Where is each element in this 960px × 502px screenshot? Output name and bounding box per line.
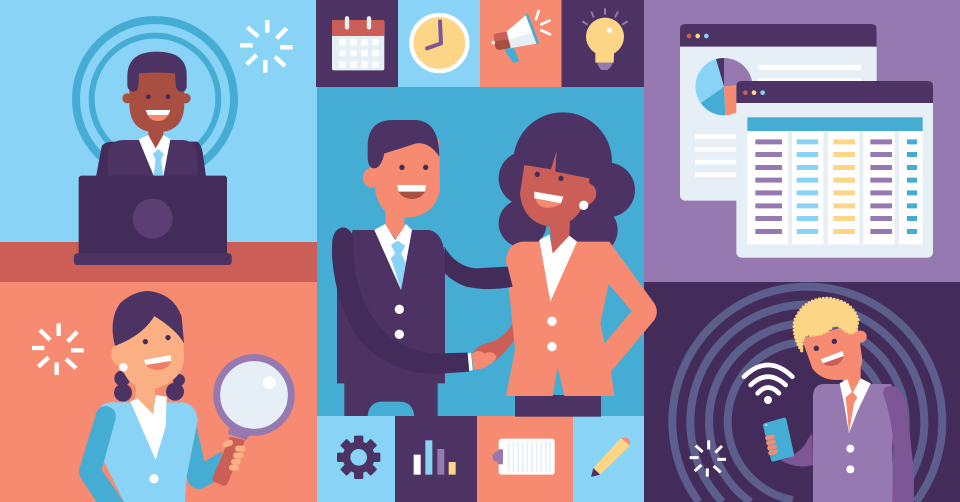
woman in coral jacket xyxy=(473,112,657,417)
front window with table xyxy=(736,81,933,258)
icon: calendar xyxy=(332,18,384,70)
icon: pencil xyxy=(591,438,630,477)
icon: clock xyxy=(411,15,467,71)
icon: megaphone xyxy=(492,11,550,63)
handshake figures xyxy=(332,112,657,417)
panel: woman with magnifying glass xyxy=(0,282,317,502)
panel: purple dashboard background with windows xyxy=(644,0,960,283)
icon: sparkle xyxy=(690,440,726,477)
phone xyxy=(763,418,794,462)
magnifying glass xyxy=(212,358,291,486)
panel: bottom icon row xyxy=(317,416,644,502)
presenter figure xyxy=(96,52,206,177)
woman figure xyxy=(79,291,222,502)
man figure xyxy=(781,298,914,502)
icon: clipboard xyxy=(492,439,555,475)
back window with pie chart xyxy=(680,24,877,201)
laptop xyxy=(74,176,232,265)
panel: man with phone and wifi xyxy=(644,282,960,502)
concentric signal rings xyxy=(672,287,942,502)
icon: sparkle xyxy=(32,323,84,375)
pie chart xyxy=(695,58,753,115)
panel: handshake background xyxy=(317,87,644,417)
icon: sparkle xyxy=(240,20,293,73)
icon: bar chart xyxy=(414,440,456,475)
icon: wifi xyxy=(744,365,792,404)
data table xyxy=(747,117,923,244)
man in dark suit xyxy=(332,120,513,416)
panel: presenter at laptop xyxy=(0,0,317,283)
handshake hand xyxy=(472,351,497,370)
icon: light bulb xyxy=(583,9,627,70)
icon: gear xyxy=(337,436,380,479)
panel: top icon row xyxy=(316,0,644,87)
concentric rings behind presenter xyxy=(76,20,234,178)
